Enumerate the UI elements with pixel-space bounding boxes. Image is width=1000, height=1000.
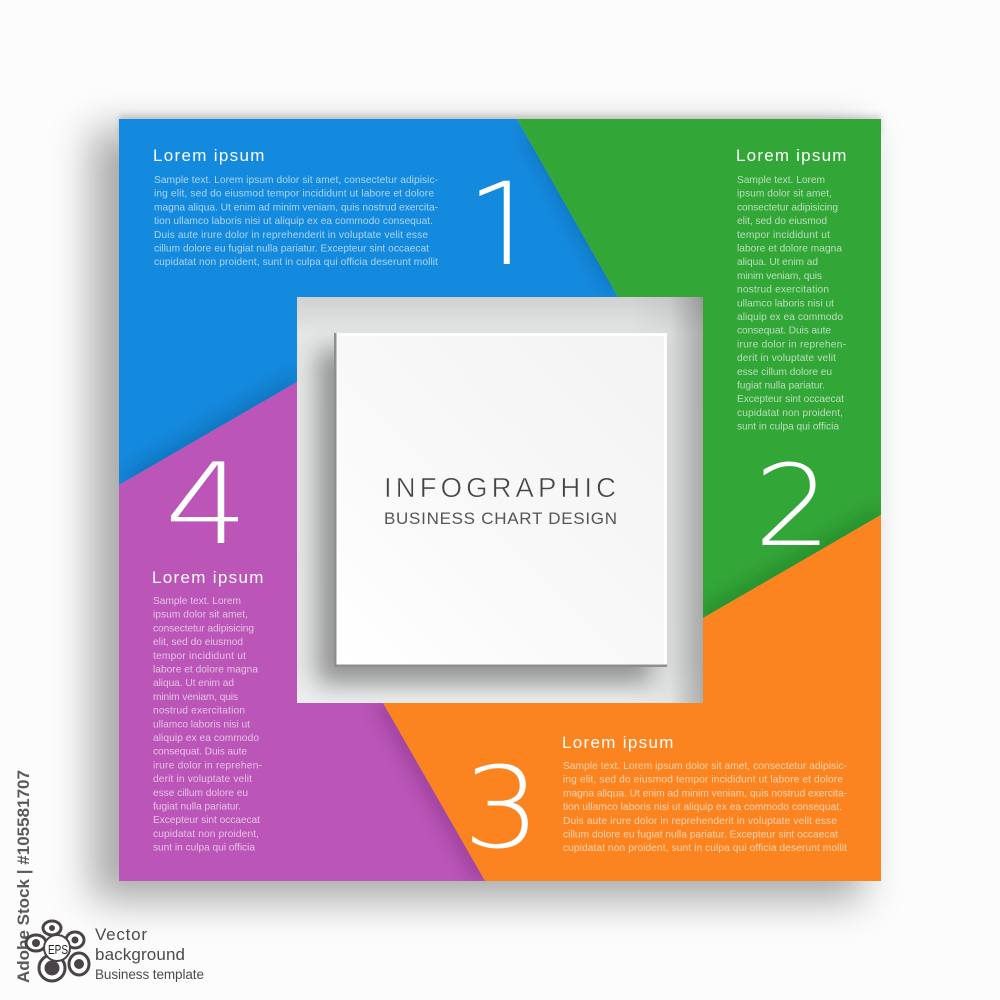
central card xyxy=(334,333,667,667)
footer caption: Business template xyxy=(95,967,204,982)
body text 2: Sample text. Lorem xyxy=(737,175,825,186)
body text 2: labore et dolore magna xyxy=(737,244,842,254)
body text 1: cillum dolore eu fugiat nulla pariatur. Excepteur sint occaecat xyxy=(154,244,429,254)
body text 1: ing elit, sed do eiusmod tempor incididunt ut labore et dolore xyxy=(154,189,434,200)
body text 2: consequat. Duis aute xyxy=(737,326,831,337)
panel 3: orange xyxy=(383,515,881,881)
body text 4: esse cillum dolore eu xyxy=(153,788,248,799)
central recessed well xyxy=(297,297,703,703)
subtitle: BUSINESS CHART DESIGN xyxy=(384,509,617,528)
title: INFOGRAPHIC xyxy=(384,472,616,503)
body text 2: nostrud exercitation xyxy=(737,285,829,296)
body text 2: aliquip ex ea commodo xyxy=(737,312,843,323)
body text 2: minim veniam, quis xyxy=(737,271,822,282)
body text 4: aliquip ex ea commodo xyxy=(153,733,259,744)
body text 3: Duis aute irure dolor in reprehenderit in voluptate velit esse xyxy=(563,816,837,827)
body text 2: derit in voluptate velit xyxy=(737,353,836,364)
drop shadow behind chart xyxy=(92,130,862,900)
soft top edge shadow xyxy=(119,115,881,135)
body text 4: nostrud exercitation xyxy=(153,706,245,717)
body text 4: Sample text. Lorem xyxy=(153,596,241,607)
body text 3: ing elit, sed do eiusmod tempor incididunt ut labore et dolore xyxy=(563,775,843,786)
body text 4: elit, sed do eiusmod xyxy=(153,637,243,648)
body text 3: magna aliqua. Ut enim ad minim veniam, quis nostrud exercita- xyxy=(563,788,847,799)
body text 1: Duis aute irure dolor in reprehenderit in voluptate velit esse xyxy=(154,230,428,241)
body text 3: cupidatat non proident, sunt in culpa qui officia deserunt mollit xyxy=(563,843,847,854)
body text 2: irure dolor in reprehen- xyxy=(737,339,846,350)
body text 4: consequat. Duis aute xyxy=(153,747,247,758)
body text 2: ullamco laboris nisi ut xyxy=(737,298,834,309)
heading 1: Lorem ipsum xyxy=(153,146,265,165)
heading 3: Lorem ipsum xyxy=(562,733,674,752)
body text 1: cupidatat non proident, sunt in culpa qui officia deserunt mollit xyxy=(154,257,438,268)
body text 4: aliqua. Ut enim ad xyxy=(153,678,234,689)
number 4: 4 xyxy=(164,439,249,570)
body text 4: cupidatat non proident, xyxy=(153,829,259,840)
body text 2: consectetur adipisicing xyxy=(737,202,838,213)
body text 4: Excepteur sint occaecat xyxy=(153,815,260,826)
body text 4: ipsum dolor sit amet, xyxy=(153,610,248,621)
heading 2: Lorem ipsum xyxy=(736,146,847,165)
body text 4: tempor incididunt ut xyxy=(153,651,246,662)
body text 3: cillum dolore eu fugiat nulla pariatur. Excepteur sint occaecat xyxy=(563,830,838,840)
panel 1: blue xyxy=(119,119,618,485)
body text 2: aliqua. Ut enim ad xyxy=(737,257,818,268)
heading 4: Lorem ipsum xyxy=(152,568,264,587)
body text 4: minim veniam, quis xyxy=(153,692,238,703)
body text 2: fugiat nulla pariatur. xyxy=(737,380,825,392)
body text 4 xyxy=(153,596,262,854)
body text 2: sunt in culpa qui officia xyxy=(737,422,839,433)
body text 2: cupidatat non proident, xyxy=(737,408,843,419)
body text 4: consectetur adipisicing xyxy=(153,623,254,634)
panel 2: green xyxy=(517,119,881,618)
body text 4: derit in voluptate velit xyxy=(153,774,252,785)
body text 3: tion ullamco laboris nisi ut aliquip ex ea commodo consequat. xyxy=(563,802,842,813)
body text 2: tempor incididunt ut xyxy=(737,230,830,241)
body text 4: fugiat nulla pariatur. xyxy=(153,802,241,812)
body text 1: Sample text. Lorem ipsum dolor sit amet, consectetur adipisic- xyxy=(154,175,438,186)
panel 4: purple xyxy=(119,382,485,881)
body text 4: sunt in culpa qui officia xyxy=(153,843,255,854)
body text 4: ullamco laboris nisi ut xyxy=(153,719,250,730)
body text 2 xyxy=(737,175,846,433)
body text 2: Excepteur sint occaecat xyxy=(737,394,844,405)
body text 3: Sample text. Lorem ipsum dolor sit amet, consectetur adipisic- xyxy=(563,761,847,772)
footer caption: background xyxy=(95,945,185,964)
body text 2: esse cillum dolore eu xyxy=(737,367,832,378)
icon: EPS badge xyxy=(26,921,89,981)
stock id side label: Adobe Stock | #105581707 xyxy=(14,770,33,983)
body text 1: magna aliqua. Ut enim ad minim veniam, quis nostrud exercita- xyxy=(154,202,438,213)
body text 1 xyxy=(154,175,438,268)
body text 2: ipsum dolor sit amet, xyxy=(737,189,832,200)
footer caption: Vector xyxy=(95,925,147,944)
number 3: 3 xyxy=(463,743,541,874)
body text 4: labore et dolore magna xyxy=(153,664,258,676)
icon label: EPS xyxy=(48,942,68,957)
body text 2: elit, sed do eiusmod xyxy=(737,216,827,227)
body text 1: tion ullamco laboris nisi ut aliquip ex ea commodo consequat. xyxy=(154,216,433,227)
body text 3 xyxy=(563,761,847,854)
footer caption xyxy=(95,925,204,982)
number 2: 2 xyxy=(754,441,832,572)
body text 4: irure dolor in reprehen- xyxy=(153,760,262,771)
number 1: 1 xyxy=(466,157,544,299)
